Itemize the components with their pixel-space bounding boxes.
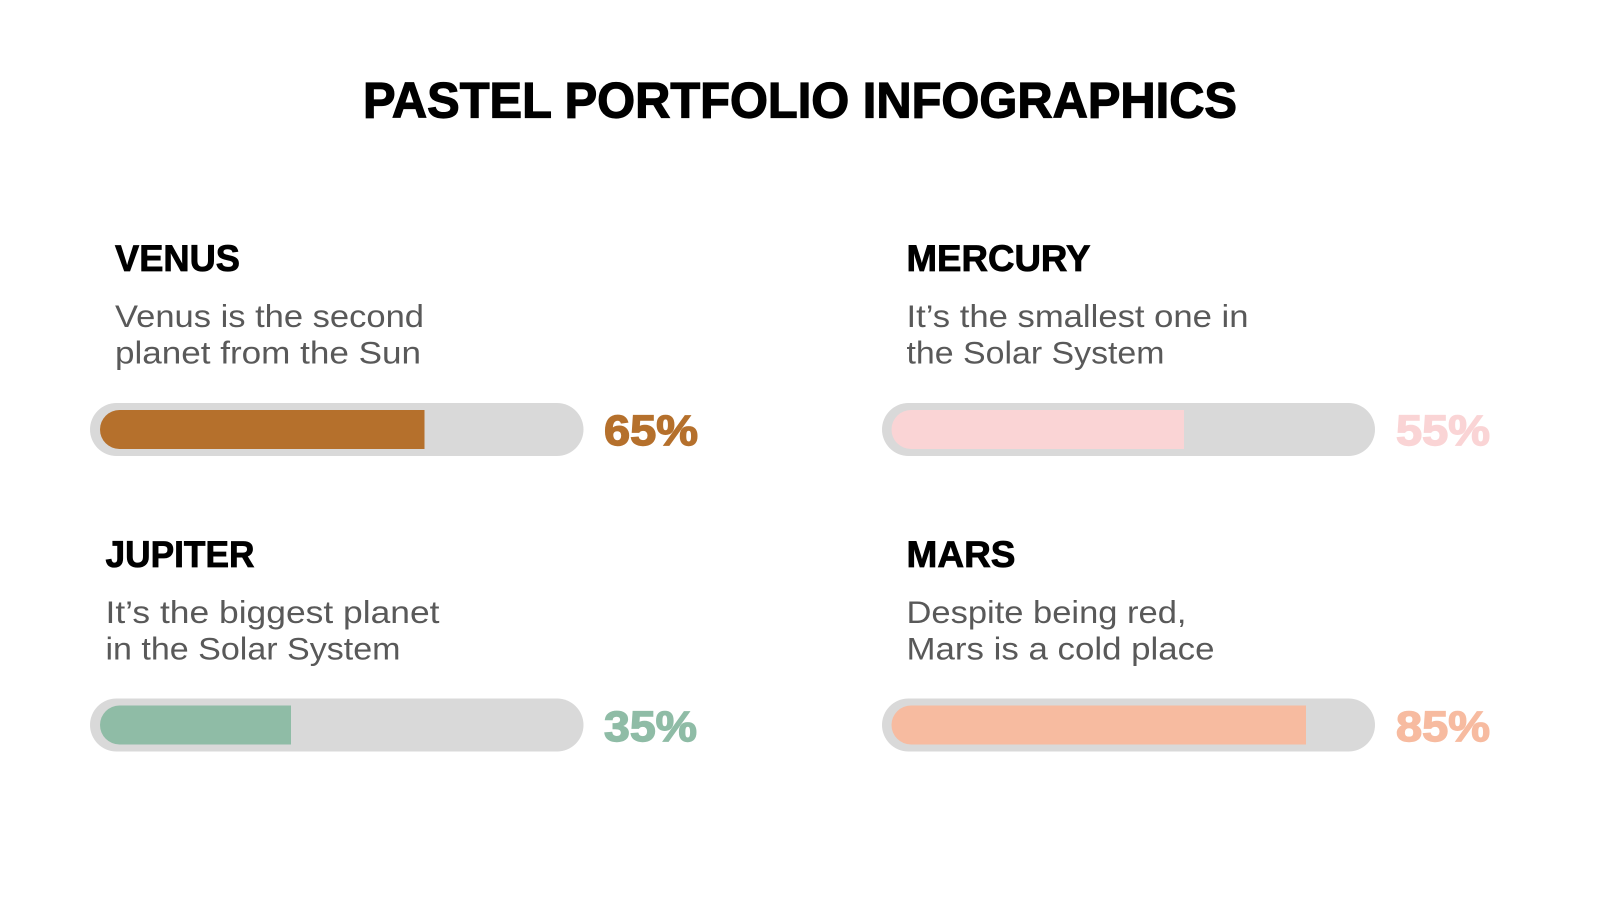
text block: venus description: planet from the Sun bbox=[115, 334, 421, 370]
panel: venus bbox=[90, 238, 698, 456]
text block: mars description: Mars is a cold place bbox=[906, 630, 1214, 666]
progress bar: mars 85% bbox=[882, 698, 1375, 752]
value: 65%: 65% bbox=[604, 407, 698, 455]
text block: venus description bbox=[115, 298, 424, 370]
value: 85%: 85% bbox=[1396, 703, 1490, 751]
text block: mars description bbox=[906, 594, 1214, 666]
value: 35%: 35% bbox=[604, 703, 697, 751]
progress bar: mercury 55% bbox=[882, 403, 1375, 456]
text block: jupiter description: It’s the biggest planet bbox=[106, 594, 440, 630]
text block: mercury description bbox=[906, 298, 1248, 370]
heading: mercury: MERCURY bbox=[906, 238, 1091, 279]
heading: mars: MARS bbox=[906, 534, 1016, 575]
text block: venus description: Venus is the second bbox=[115, 298, 424, 334]
heading: jupiter: JUPITER bbox=[106, 534, 254, 575]
heading: venus: VENUS bbox=[115, 238, 240, 279]
text block: mercury description: the Solar System bbox=[906, 334, 1164, 370]
text block: mars description: Despite being red, bbox=[906, 594, 1186, 630]
progress bar: jupiter 35% bbox=[90, 698, 584, 752]
panel: mars bbox=[882, 534, 1490, 752]
title: PASTEL PORTFOLIO INFOGRAPHICS bbox=[363, 72, 1237, 128]
progress bar: venus 65% bbox=[90, 403, 584, 456]
value: 55%: 55% bbox=[1396, 407, 1490, 455]
text block: jupiter description: in the Solar System bbox=[106, 630, 400, 666]
text block: jupiter description bbox=[106, 594, 440, 666]
text block: mercury description: It’s the smallest one in bbox=[906, 298, 1248, 334]
panel: mercury bbox=[882, 238, 1490, 456]
panel: jupiter bbox=[90, 534, 697, 752]
